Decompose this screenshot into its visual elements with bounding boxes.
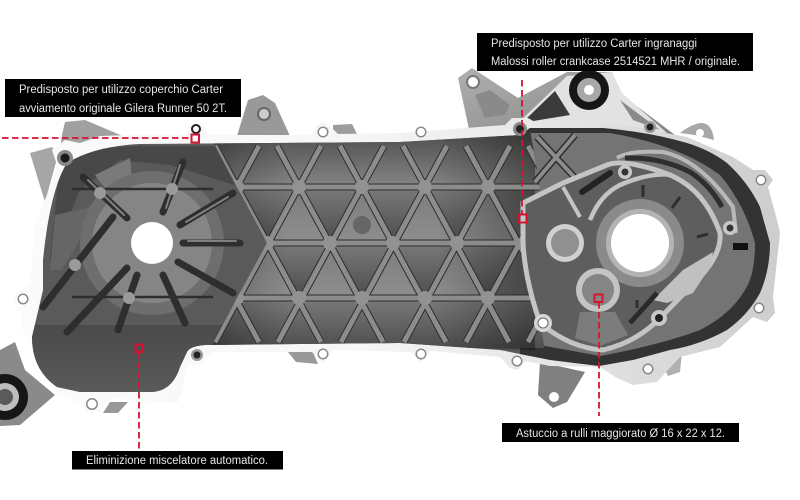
label box <box>72 451 283 470</box>
callout: carter avviamento <box>2 79 241 142</box>
leader line <box>138 352 140 451</box>
label box <box>5 79 241 117</box>
label box <box>502 423 739 442</box>
radial ribs <box>637 185 708 308</box>
label box: Predisposto per utilizzo coperchio Carter <box>19 84 223 96</box>
right chamber floor <box>520 133 755 356</box>
left chamber shading <box>50 146 235 315</box>
roller bearing seat <box>576 268 620 312</box>
label box: Eliminizione miscelatore automatico. <box>86 455 268 467</box>
leader line <box>598 302 600 416</box>
silver wedge <box>653 252 713 303</box>
marker <box>136 344 143 352</box>
crankcase photo <box>0 68 800 426</box>
inner cavity <box>32 128 770 392</box>
label box <box>477 33 753 71</box>
bolts <box>618 165 632 179</box>
label box: Astuccio a rulli maggiorato Ø 16 x 22 x 12. <box>516 428 725 440</box>
wall loop <box>523 163 720 350</box>
small boss <box>546 224 584 262</box>
upper left lugs <box>30 95 358 202</box>
label box: avviamento originale Gilera Runner 50 2T. <box>19 103 227 115</box>
black notch <box>733 243 748 250</box>
label box: Predisposto per utilizzo Carter ingranaggi <box>491 38 697 50</box>
bottom lugs <box>0 342 682 426</box>
label box: Malossi roller crankcase 2514521 MHR / originale. <box>491 56 740 68</box>
right gear chamber <box>523 152 748 350</box>
callout: astuccio a rulli <box>502 294 739 442</box>
top-right mounting lug <box>458 68 714 140</box>
outer rim <box>13 118 780 413</box>
outer gear wall <box>617 152 736 233</box>
chamber channel <box>625 158 722 207</box>
marker <box>594 294 602 302</box>
upper right ribs <box>535 135 577 182</box>
leader line <box>2 137 191 139</box>
marker <box>518 214 526 222</box>
triangular rib grid <box>212 133 544 350</box>
callout: carter ingranaggi <box>477 33 753 222</box>
left hub ribs <box>43 162 240 332</box>
rim bolt holes <box>18 121 766 410</box>
foundry logo <box>353 216 371 234</box>
gear shaft ring <box>596 199 684 287</box>
lower floor section <box>575 312 628 346</box>
marker <box>192 134 199 142</box>
inner arm <box>590 174 672 220</box>
left hub hole <box>131 222 173 264</box>
callout: miscelatore <box>72 344 283 470</box>
gear shaft hole <box>611 214 669 272</box>
leader line <box>521 80 523 214</box>
